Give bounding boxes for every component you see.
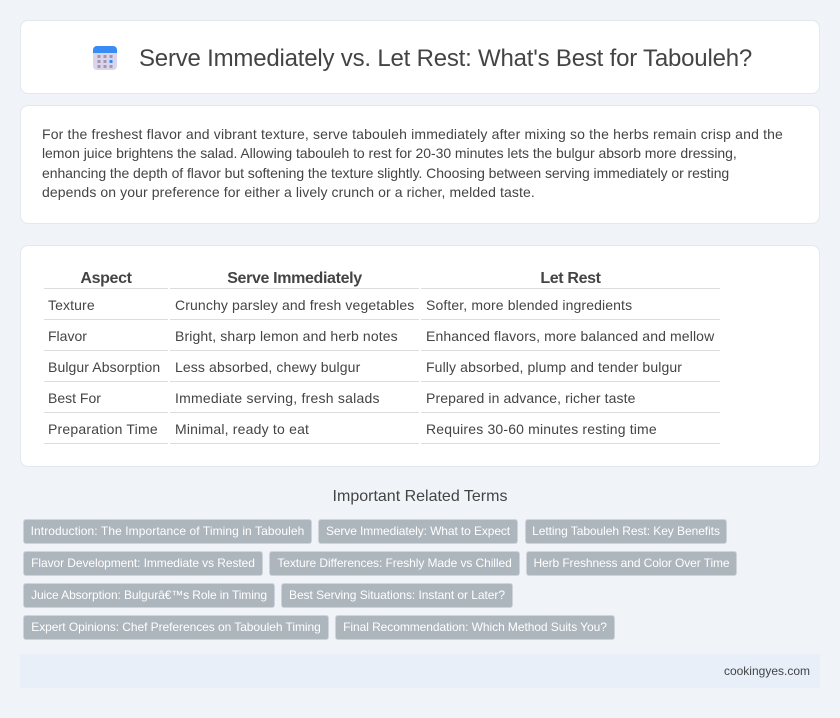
panel: comparison table: Fully absorbed, plump and tender bulgur [426, 359, 682, 375]
row: Texture: Texture [48, 297, 95, 313]
intro paragraph: enhancing the depth of flavor but softening the texture slightly. Choosing between serving immediately or resting [42, 165, 729, 181]
tag: Flavor Development: Immediate vs Rested [31, 556, 255, 570]
panel: comparison table: Minimal, ready to eat [175, 421, 309, 437]
tag: Expert Opinions: Chef Preferences on Tabouleh Timing [31, 620, 321, 634]
panel: comparison table [20, 245, 820, 467]
tag [23, 519, 312, 544]
tag: Juice Absorption: Bulgurâ€™s Role in Timing [31, 588, 267, 602]
tag: Best Serving Situations: Instant or Later? [289, 588, 505, 602]
tag list [23, 519, 737, 640]
tag [23, 551, 263, 576]
intro paragraph: depends on your preference for either a lively crunch or a richer, melded taste. [42, 184, 535, 200]
footer source: cookingyes.com [724, 664, 810, 678]
tag: Herb Freshness and Color Over Time [533, 556, 730, 570]
panel: comparison table: Less absorbed, chewy bulgur [175, 359, 360, 375]
tag: Letting Tabouleh Rest: Key Benefits [532, 524, 720, 538]
tag: Texture Differences: Freshly Made vs Chilled [277, 556, 512, 570]
panel: comparison table: Enhanced flavors, more balanced and mellow [426, 328, 714, 344]
icon: calendar [93, 46, 117, 70]
tag: Serve Immediately: What to Expect [326, 524, 510, 538]
tag [23, 583, 275, 608]
panel: comparison table: Bright, sharp lemon and herb notes [175, 328, 398, 344]
panel: intro text [20, 105, 820, 224]
panel: comparison table: Prepared in advance, richer taste [426, 390, 636, 406]
tag [526, 551, 737, 576]
tag [23, 615, 329, 640]
panel: comparison table: Serve Immediately [227, 270, 362, 287]
table header: Aspect [80, 270, 132, 287]
row: Preparation Time: Preparation Time [48, 421, 158, 437]
tag [525, 519, 727, 544]
tag: Final Recommendation: Which Method Suits You? [343, 620, 607, 634]
panel: comparison table: Softer, more blended ingredients [426, 297, 632, 313]
row: Best For: Best For [48, 390, 101, 406]
panel: comparison table: Crunchy parsley and fresh vegetables [175, 297, 414, 313]
row: Bulgur Absorption: Bulgur Absorption [48, 359, 160, 375]
intro paragraph: lemon juice brightens the salad. Allowing tabouleh to rest for 20-30 minutes lets the bulgur absorb more dressing, [42, 145, 737, 161]
title: Serve Immediately vs. Let Rest: What's Best for Tabouleh? [139, 45, 752, 72]
heading: related terms: Important Related Terms [333, 488, 507, 505]
panel: comparison table: Let Rest [540, 270, 601, 287]
tag: Introduction: The Importance of Timing in Tabouleh [31, 524, 304, 538]
intro paragraph [42, 126, 783, 200]
tag [318, 519, 518, 544]
tag [281, 583, 513, 608]
footer bar [20, 654, 820, 688]
tag [335, 615, 615, 640]
panel: comparison table: Immediate serving, fresh salads [175, 390, 380, 406]
intro paragraph: For the freshest flavor and vibrant texture, serve tabouleh immediately after mixing so the herbs remain crisp and the [42, 126, 783, 142]
row: Flavor: Flavor [48, 328, 87, 344]
header panel [20, 20, 820, 94]
tag [269, 551, 520, 576]
panel: comparison table: Requires 30-60 minutes resting time [426, 421, 657, 437]
